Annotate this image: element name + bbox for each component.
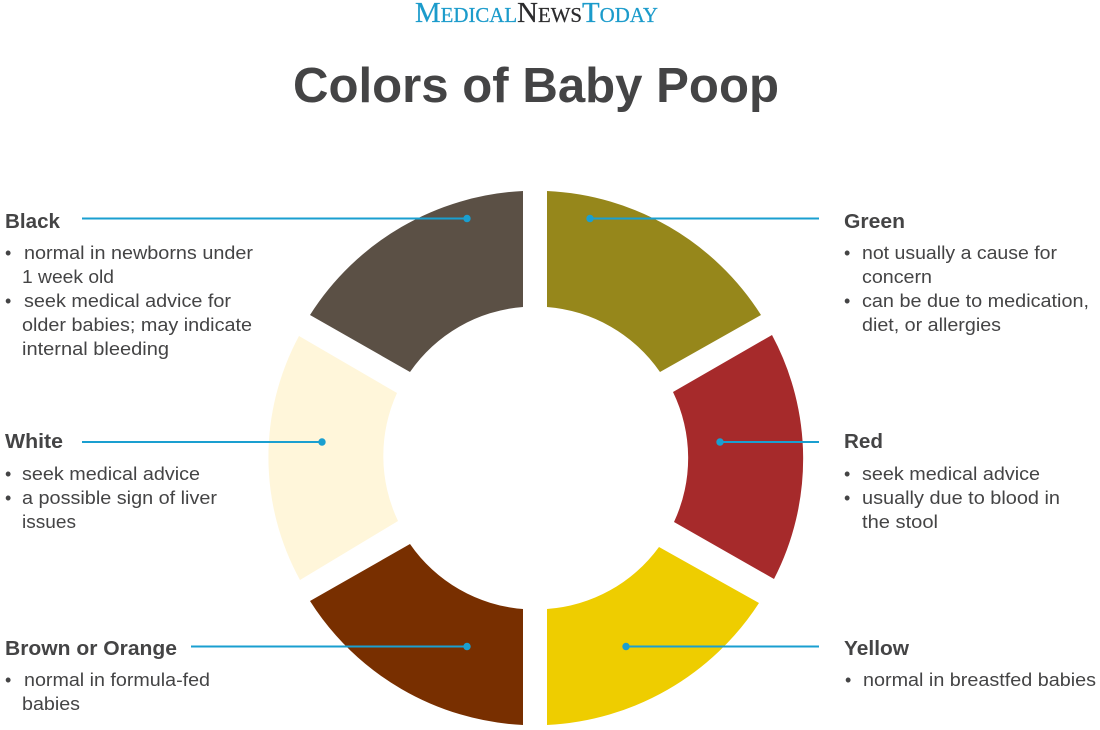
text block: red: usually due to blood in [862,488,1060,508]
segment: green [547,191,761,372]
text block: red: seek medical advice [862,464,1040,484]
donut chart: poop colors [268,191,803,725]
text block: black: older babies; may indicate [22,315,252,335]
text block: white: seek medical advice [22,464,200,484]
segment: red [673,335,803,579]
text block: red: • [844,464,850,484]
segment: yellow [547,547,759,725]
text block: green: Green [844,210,905,233]
text block: yellow: Yellow [844,637,909,660]
leader line: red [716,438,819,446]
text block: white: White [5,430,63,453]
text block: yellow [844,637,1096,690]
text block: brown or orange: • [5,670,11,690]
text block: green [844,210,1089,335]
segment: black [310,191,523,372]
text block: red: the stool [862,512,938,532]
text block: white: a possible sign of liver [22,488,217,508]
text block: white [5,430,217,532]
text block: black: Black [5,210,61,233]
leader line: yellow [622,643,819,650]
text block: yellow: • [845,670,851,690]
segment: brown or orange [310,544,523,725]
text block: black: seek medical advice for [24,291,231,311]
text block: white: • [5,464,11,484]
text block: black: • [5,243,11,263]
text block: red: • [844,488,850,508]
leader line: black [82,215,471,222]
text block: black [5,210,253,359]
text block: brown or orange: Brown or Orange [5,637,177,660]
text block: black: normal in newborns under [24,243,253,263]
text block: green: • [844,243,850,263]
title: Colors of Baby Poop [293,59,779,113]
text block: yellow: normal in breastfed babies [863,670,1096,690]
text block: red: Red [844,430,883,453]
text block: black: 1 week old [22,267,114,287]
leader line: white [82,438,326,446]
text block: green: diet, or allergies [862,315,1001,335]
text block: brown or orange [5,637,210,714]
text block: green: not usually a cause for [862,243,1057,263]
leader line: green [586,215,819,222]
text block: green: concern [862,267,932,287]
text block: brown or orange: normal in formula-fed [24,670,210,690]
text block: white: issues [22,512,76,532]
text block: green: can be due to medication, [862,291,1089,311]
segment: white [268,336,398,580]
text block: red [844,430,1060,532]
text block: white: • [5,488,11,508]
text block: black: internal bleeding [22,339,169,359]
leader line: brown or orange [191,643,471,650]
text block: black: • [5,291,11,311]
text block: green: • [844,291,850,311]
text block: brown or orange: babies [22,694,80,714]
